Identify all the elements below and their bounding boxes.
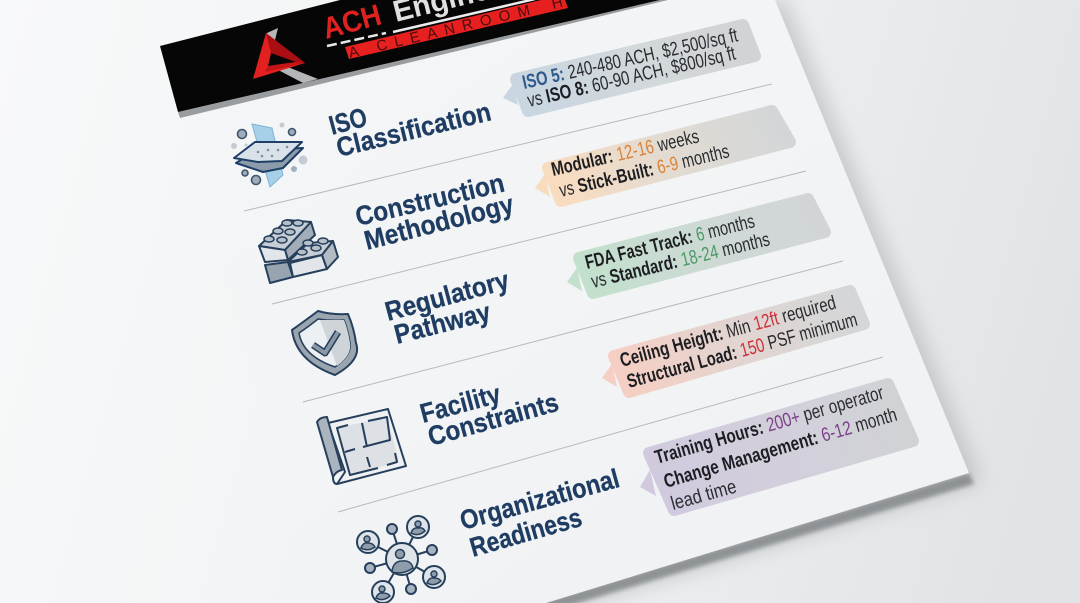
callout: FDA Fast Track vs Standard: vs Standard: 18-24 months [589, 228, 772, 293]
callout: training hours and change management [640, 382, 913, 515]
black banner [160, 0, 660, 112]
row 2: Construction Methodology [259, 111, 790, 283]
callout: training hours and change management: lead time [668, 476, 739, 515]
row 4: Facility Constraints [317, 291, 864, 484]
heading: Facility [417, 379, 504, 429]
paper sheet [160, 0, 969, 603]
row 5: Organizational Readiness [357, 382, 913, 603]
icon: building bricks [259, 220, 338, 283]
header underside strip [178, 0, 668, 118]
heading: ISO [326, 102, 370, 141]
callout: ISO 5 vs ISO 8: ISO 5: 240-480 ACH, $2,500/sq ft [520, 24, 740, 94]
callout: Modular vs Stick-Built [535, 111, 790, 202]
heading second line: Methodology [361, 189, 517, 256]
paper shadow [400, 0, 982, 603]
tagline: A CLEANROOM [347, 2, 532, 62]
callout: training hours and change management: Training Hours: 200+ per operator [652, 382, 886, 469]
dashed accent line [327, 33, 386, 46]
callout: FDA Fast Track vs Standard: FDA Fast Track: 6 months [583, 210, 757, 274]
callout: FDA Fast Track vs Standard [567, 199, 825, 293]
white accent line [393, 0, 535, 32]
heading: Regulatory [382, 265, 512, 327]
heading second line: Classification [333, 97, 494, 163]
icon: floor plan blueprint [317, 409, 406, 484]
callout: ISO 5 vs ISO 8: vs ISO 8: 60-90 ACH, $800/sq ft [525, 42, 738, 112]
callout: training hours and change management: Change Management: 6-12 month [661, 404, 900, 493]
row 1: ISO Classification [231, 24, 755, 187]
callout: ceiling height and structural load: Ceiling Height: Min 12ft required [618, 292, 838, 372]
header banner [160, 0, 668, 118]
icon: people network [357, 516, 445, 603]
callout: ceiling height and structural load: Structural Load: 150 PSF minimum [625, 309, 860, 393]
logo: red triangle [253, 28, 318, 83]
heading: Construction [352, 168, 507, 232]
row dividers [244, 84, 883, 512]
heading: Organizational [457, 463, 623, 536]
row 3: Regulatory Pathway [292, 199, 825, 375]
icon: cleanroom layers [231, 122, 308, 187]
heading second line: Constraints [425, 387, 562, 452]
heading second line: Pathway [391, 297, 493, 350]
red tagline strip [345, 0, 568, 59]
icon: shield with check [292, 311, 357, 375]
callout: Modular vs Stick-Built: vs Stick-Built: 6-9 months [557, 140, 732, 202]
callout: Modular vs Stick-Built: Modular: 12-16 weeks [549, 125, 701, 181]
heading second line: Readiness [466, 502, 585, 563]
